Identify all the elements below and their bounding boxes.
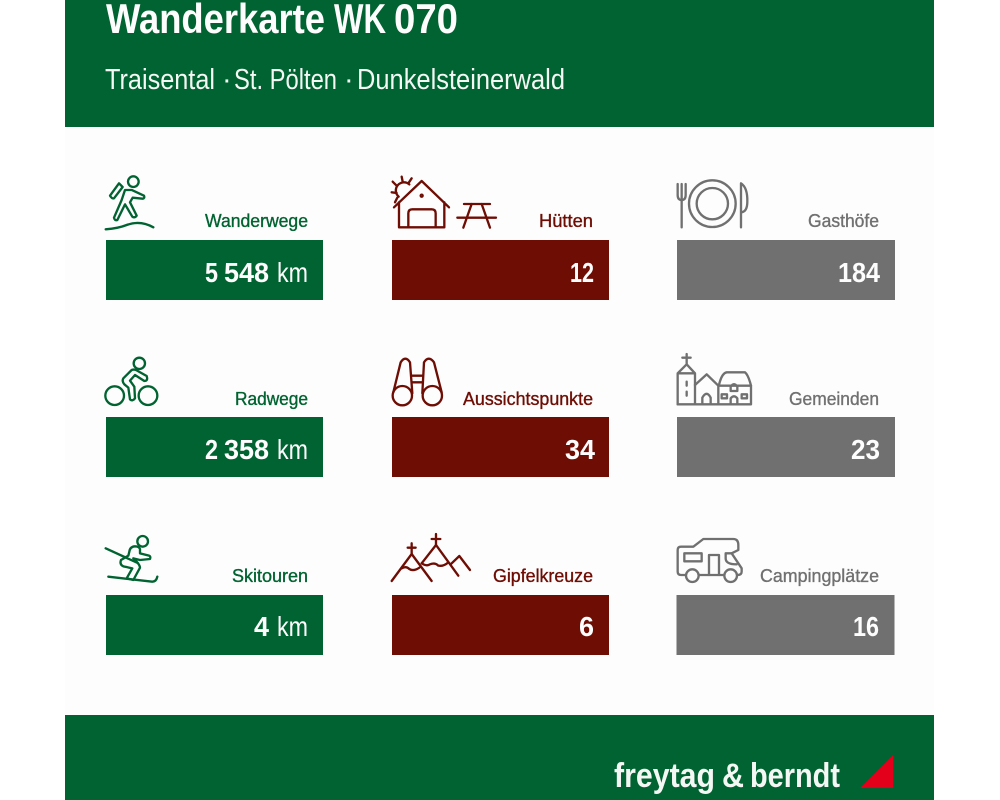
subtitle: St. Pölten <box>234 64 337 96</box>
value bar <box>392 595 609 655</box>
subtitle: · <box>344 64 354 96</box>
icon: hiker <box>106 176 153 229</box>
unit: km <box>277 257 308 288</box>
value bar <box>106 240 323 300</box>
panel: Gemeinden <box>677 354 895 477</box>
panel: Aussichtspunkte <box>392 359 609 477</box>
icon: village with church <box>678 354 751 404</box>
value bar <box>676 595 894 655</box>
value bar <box>677 417 895 477</box>
value bar <box>106 595 323 655</box>
value: 12 <box>570 257 594 288</box>
icon: mountain peaks with crosses <box>392 534 470 581</box>
subtitle: · <box>222 64 232 96</box>
label: Gemeinden <box>789 389 879 409</box>
subtitle: Traisental <box>105 64 215 96</box>
icon: skier <box>106 536 157 582</box>
value: 2 <box>205 434 218 465</box>
icon: hut with sun and picnic table <box>392 177 496 228</box>
panel: Wanderwege <box>106 176 323 300</box>
value bar <box>106 417 323 477</box>
unit: km <box>277 611 308 642</box>
label: Radwege <box>235 389 308 409</box>
value: 5 <box>205 257 218 288</box>
panel: Radwege <box>105 358 323 477</box>
icon: cyclist <box>105 358 157 405</box>
label: Aussichtspunkte <box>463 389 593 409</box>
brand name: & <box>722 757 744 795</box>
panel: Hütten <box>392 177 609 300</box>
value: 6 <box>579 611 594 642</box>
icon: plate with cutlery <box>678 180 747 227</box>
value: 184 <box>838 257 880 288</box>
brand name: freytag <box>614 757 715 795</box>
label: Hütten <box>539 211 593 231</box>
value: 23 <box>851 434 880 465</box>
footer banner <box>65 715 934 800</box>
icon: camper van <box>678 539 742 582</box>
panel: Gasthöfe <box>677 180 895 300</box>
value bar <box>392 417 609 477</box>
brand name: berndt <box>750 757 840 795</box>
label: Campingplätze <box>760 566 879 586</box>
value bar <box>392 240 609 300</box>
label: Wanderwege <box>205 211 308 231</box>
label: Gipfelkreuze <box>493 566 593 586</box>
unit: km <box>277 434 308 465</box>
value: 358 <box>224 434 269 465</box>
label: Gasthöfe <box>808 211 879 231</box>
icon: red triangle logo <box>860 755 893 788</box>
value: 16 <box>853 611 879 642</box>
value: 548 <box>224 257 269 288</box>
icon: binoculars <box>393 359 442 405</box>
value: 4 <box>254 611 269 642</box>
value: 34 <box>565 434 595 465</box>
panel: Campingplätze <box>676 539 894 655</box>
panel: Gipfelkreuze <box>392 534 609 655</box>
subtitle: Dunkelsteinerwald <box>357 64 565 96</box>
label: Skitouren <box>232 566 308 586</box>
header banner <box>65 0 934 127</box>
panel: Skitouren <box>106 536 323 655</box>
value bar <box>677 240 895 300</box>
